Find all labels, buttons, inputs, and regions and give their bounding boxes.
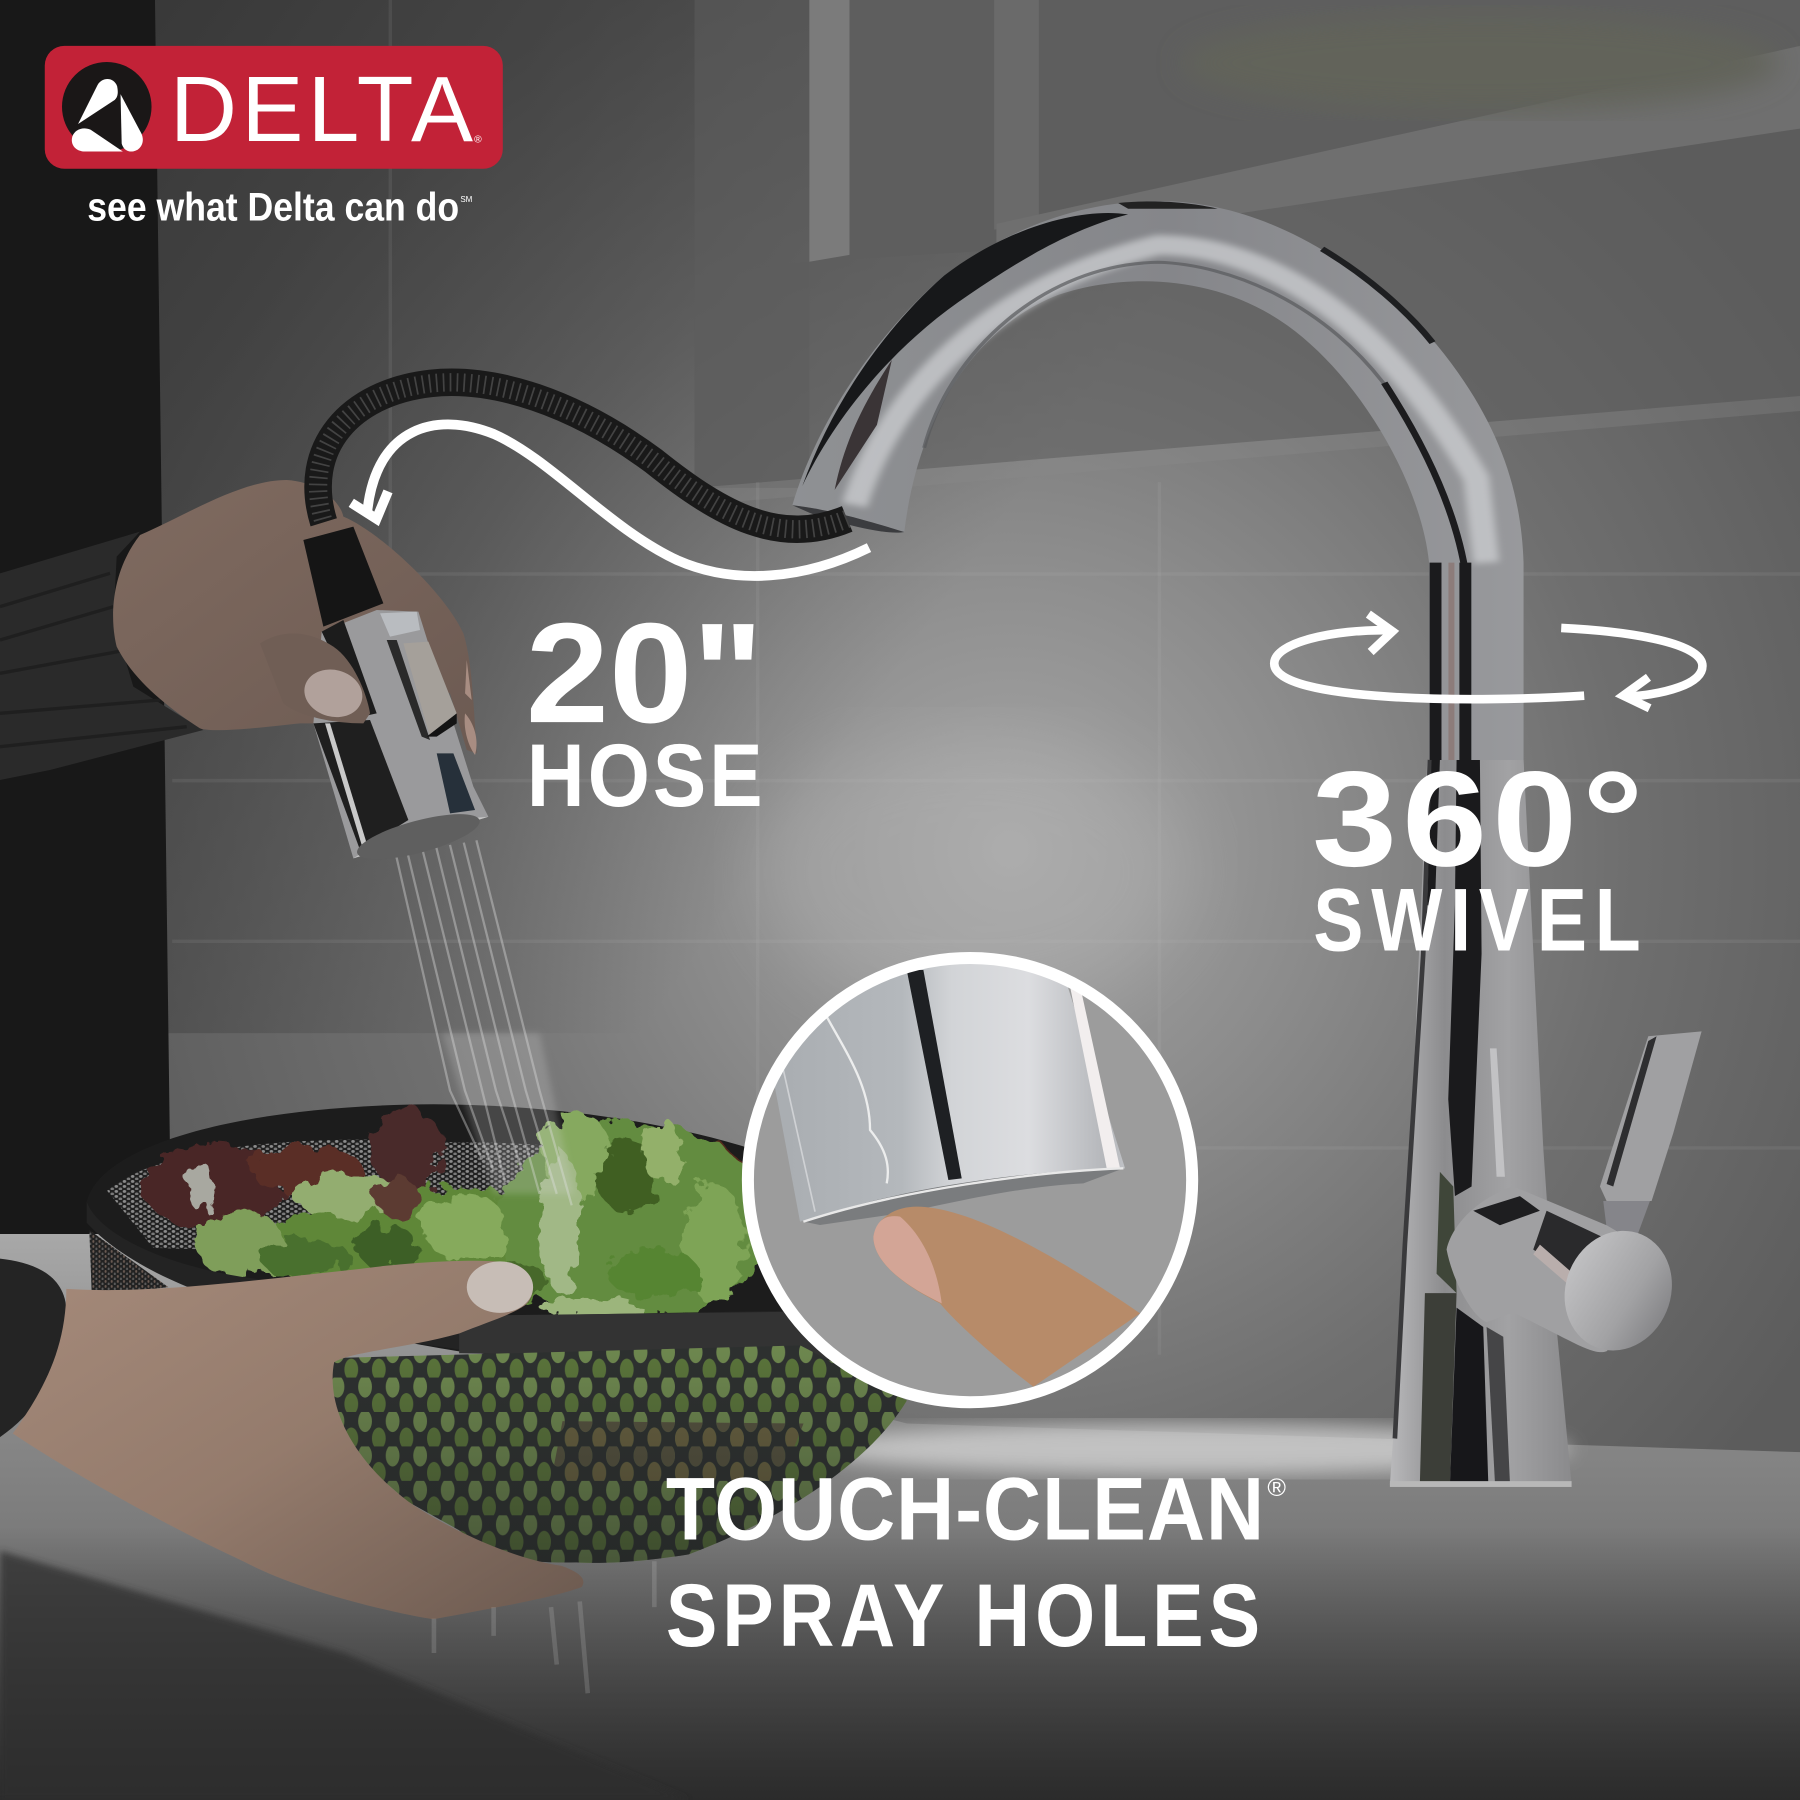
tagline: see what Delta can do (87, 184, 459, 229)
spray face (353, 817, 488, 858)
finger (873, 1207, 1140, 1387)
lever (1600, 1031, 1702, 1201)
hand (13, 1261, 583, 1619)
Delta logo: ® (474, 134, 482, 145)
water spray (396, 840, 574, 1205)
salad leaves (143, 1109, 770, 1323)
end cap (1558, 1219, 1679, 1363)
handle (1447, 1031, 1702, 1363)
left dark column (0, 0, 171, 1234)
wand head (313, 610, 488, 869)
connector (303, 527, 383, 627)
top hand, sleeve and spray wand (0, 480, 488, 869)
control stem (1490, 1048, 1505, 1177)
label: touch-clean spray holes (666, 1458, 1286, 1665)
callout circle: touch-clean detail (740, 937, 1192, 1402)
fingertips (465, 660, 477, 755)
wordmark: DELTA (170, 57, 473, 161)
faucet body (1390, 760, 1572, 1487)
fingernail (467, 1261, 533, 1313)
label: touch-clean spray holes: ® (1267, 1474, 1286, 1502)
label: touch-clean spray holes: TOUCH-CLEAN (666, 1458, 1265, 1558)
hub (1447, 1186, 1640, 1352)
Delta logo (45, 46, 503, 229)
bowl front rim (87, 1201, 907, 1362)
salad bowl (87, 1104, 907, 1563)
hose (318, 382, 847, 529)
label: 360 degree swivel: 360° (1312, 743, 1648, 895)
bowl lattice body (326, 1345, 907, 1563)
wand button (387, 640, 430, 740)
hand (113, 480, 477, 753)
thumb (260, 633, 370, 723)
bowl rim and interior (87, 1104, 800, 1359)
arrow: swivel right (1561, 628, 1702, 708)
logo mark (62, 62, 152, 152)
Delta logo: SM (460, 195, 473, 204)
label: 360 degree swivel (1312, 743, 1648, 970)
sleeve (0, 1259, 66, 1437)
label: 20 inch hose (526, 594, 766, 825)
gooseneck spout (792, 201, 1524, 780)
label: touch-clean spray holes: SPRAY HOLES (666, 1565, 1265, 1665)
bottom hand with sleeve (0, 1259, 583, 1619)
thumbnail (299, 663, 368, 723)
label: 360 degree swivel: SWIVEL (1313, 870, 1648, 970)
sleeve (0, 532, 203, 780)
arrow: hose length (351, 424, 869, 576)
label: 20 inch hose: HOSE (527, 725, 766, 825)
arrow: swivel left (1274, 614, 1584, 699)
label: 20 inch hose: 20" (526, 594, 763, 753)
water drips (434, 1561, 654, 1693)
faucet (792, 201, 1702, 1487)
spray holes (803, 1168, 1123, 1225)
counter top (0, 1234, 1800, 1800)
chrome sprayer closeup (775, 964, 1125, 1222)
wall tile lines (172, 0, 1800, 1355)
window recess (809, 0, 1800, 262)
